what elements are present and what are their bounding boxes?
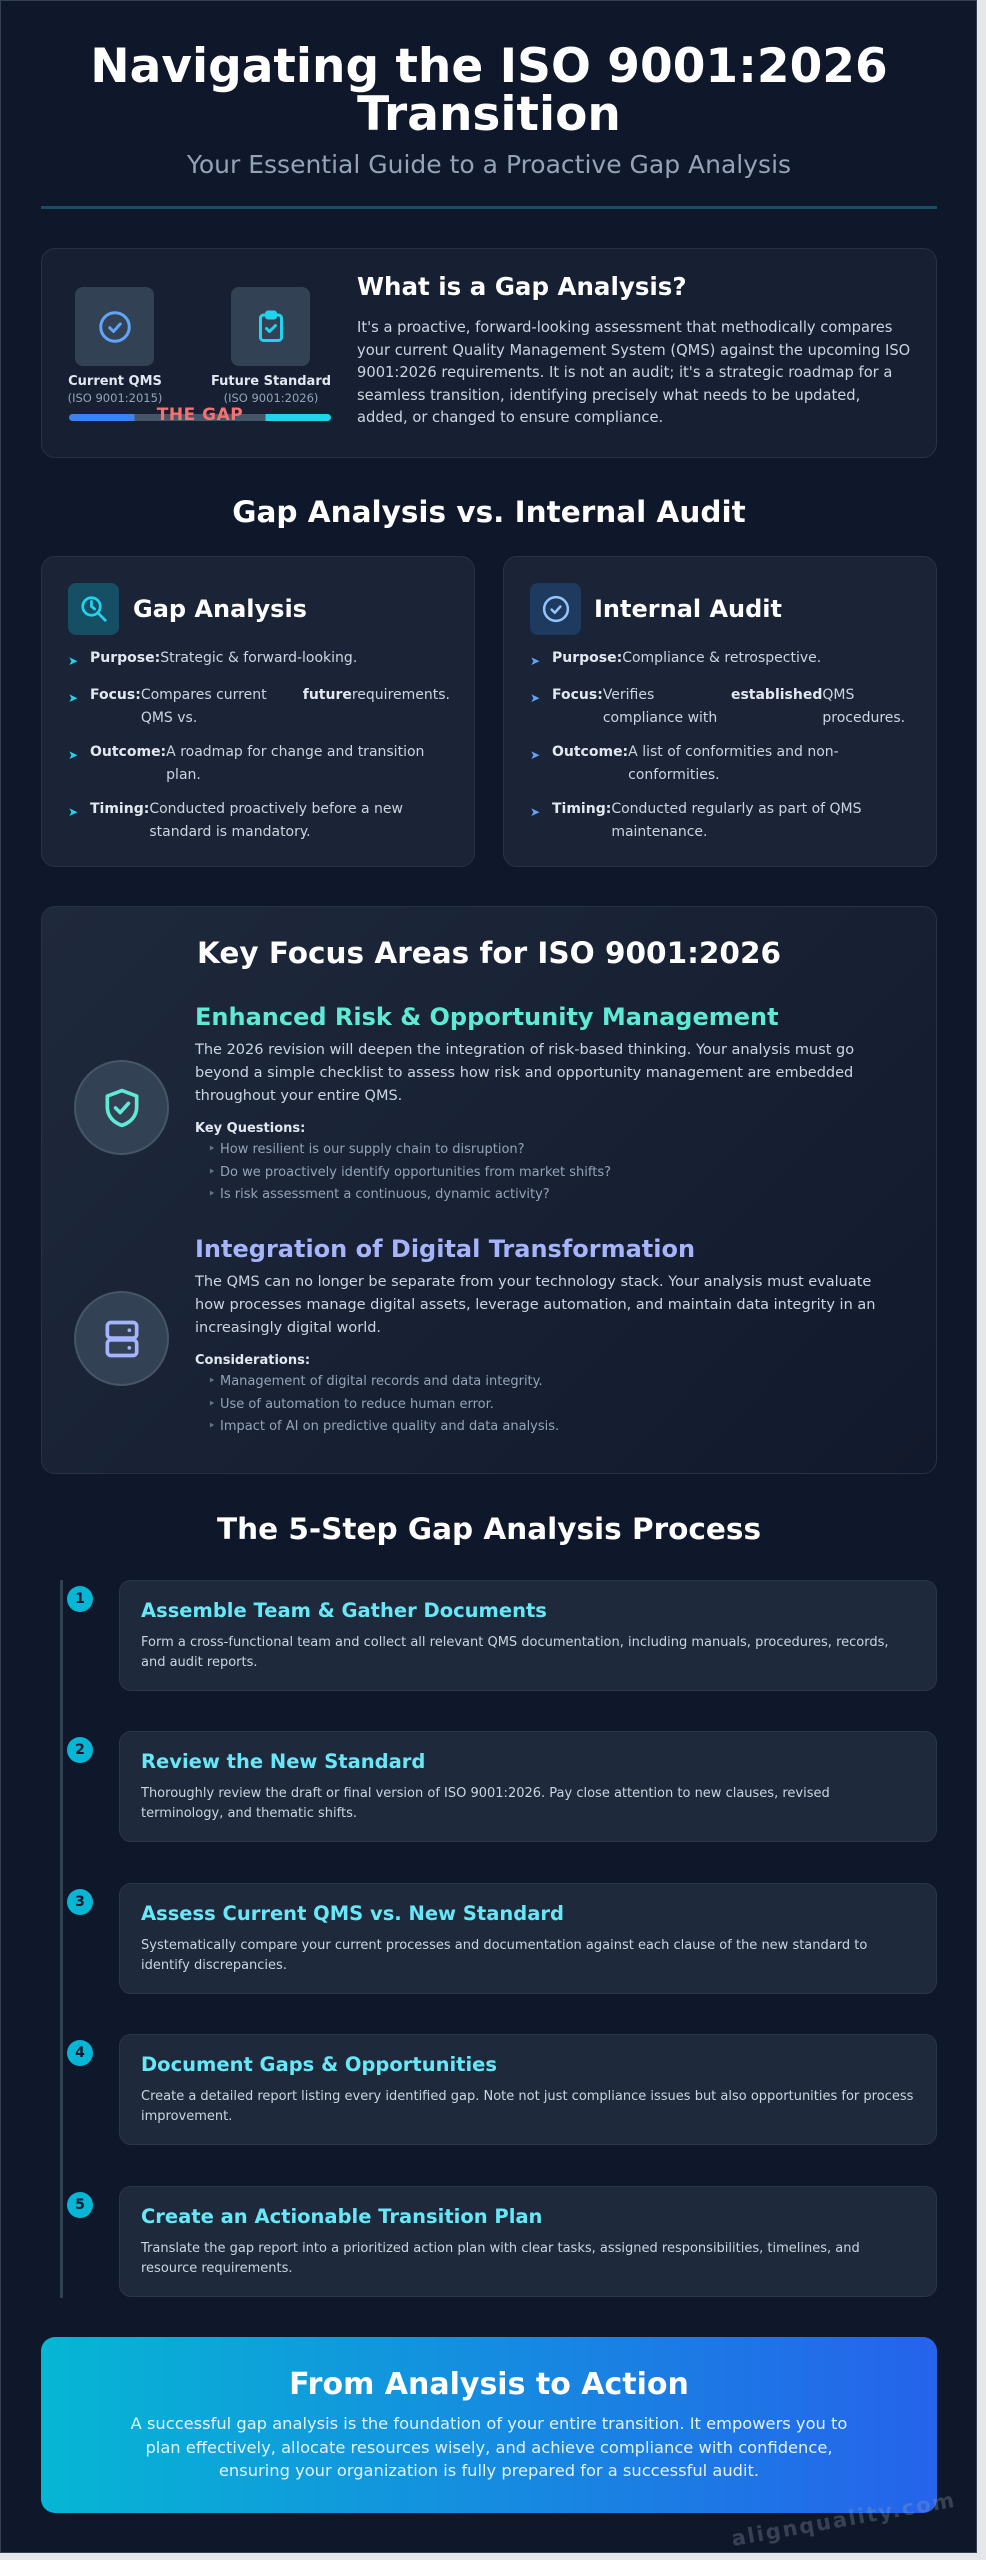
callout: from analysis to action xyxy=(41,2337,937,2513)
list: Outcome: xyxy=(90,744,166,760)
list: Conducted proactively before a new standard is mandatory. xyxy=(149,801,403,840)
text: It's a proactive, forward-looking assessment that methodically compares your current Quality Management System (QMS) against the upcoming ISO 9001:2026 requirements. It is not an audit; it's a strategic roadmap for a seamless transition, identifying precisely what needs to be updated, added, or changed to ensure compliance. xyxy=(357,319,910,426)
list: ➤ xyxy=(68,691,78,705)
step 5: Translate the gap report into a prioritized action plan with clear tasks, assigned responsibilities, timelines, and resource requirements. xyxy=(141,2241,860,2276)
step 5: 5 xyxy=(75,2197,85,2213)
list: ➤ xyxy=(530,805,540,819)
label: future standard: (ISO 9001:2026) xyxy=(224,391,318,405)
panel: what is a gap analysis xyxy=(41,248,937,458)
label: current QMS xyxy=(68,374,162,405)
step 4: 4 xyxy=(75,2045,85,2061)
the gap label: THE GAP xyxy=(157,405,243,425)
step 2: 2 xyxy=(75,1742,85,1758)
panel: internal audit xyxy=(503,556,937,867)
step 4: Create a detailed report listing every identified gap. Note not just compliance issues but also opportunities for process improvement. xyxy=(141,2089,913,2124)
list: Timing: xyxy=(90,801,149,817)
gap bar xyxy=(69,414,331,421)
icon: shield xyxy=(74,1060,169,1155)
list: established xyxy=(731,687,822,703)
heading: key focus areas: Key Focus Areas for ISO 9001:2026 xyxy=(197,936,781,970)
callout text: A successful gap analysis is the foundation of your entire transition. It empowers you to plan effectively, allocate resources wisely, and achieve compliance with confidence, ensuring your organization is fully prepared for a successful audit. xyxy=(131,2414,847,2480)
focus area: risk: Is risk assessment a continuous, dynamic activity? xyxy=(220,1187,550,1202)
list: Compares current QMS vs. requirements. xyxy=(141,687,450,726)
list: ➤ xyxy=(68,654,78,668)
step 3 xyxy=(67,1883,937,1994)
label: future standard: Future Standard xyxy=(211,374,331,389)
label: future standard xyxy=(211,374,331,405)
title: Transition xyxy=(357,87,621,142)
focus area: digital xyxy=(194,1235,875,1434)
panel: gap analysis xyxy=(41,556,475,867)
icon: future standard xyxy=(231,287,310,366)
list: ➤ xyxy=(530,654,540,668)
list: A roadmap for change and transition plan. xyxy=(166,744,424,783)
focus area: digital: Management of digital records and data integrity. xyxy=(220,1374,543,1389)
focus area: risk xyxy=(194,1003,854,1202)
list: Focus: xyxy=(90,687,141,703)
title xyxy=(90,39,888,142)
icon: check xyxy=(530,583,581,635)
list: Purpose: xyxy=(552,650,622,666)
list: ➤ xyxy=(68,748,78,762)
list: Strategic & forward-looking. xyxy=(160,650,357,666)
focus area: risk: Key Questions: xyxy=(195,1121,305,1136)
focus area: risk: How resilient is our supply chain to disruption? xyxy=(220,1142,525,1157)
heading: gap vs audit: Gap Analysis vs. Internal Audit xyxy=(232,495,746,529)
step 3: Systematically compare your current processes and documentation against each clause of the new standard to identify discrepancies. xyxy=(141,1938,867,1972)
step 1 xyxy=(67,1580,937,1691)
focus area: digital: Integration of Digital Transformation xyxy=(195,1235,695,1263)
list: A list of conformities and non-conformities. xyxy=(628,744,839,783)
list: ➤ xyxy=(68,805,78,819)
list: Outcome: xyxy=(552,744,628,760)
step 1: Form a cross-functional team and collect all relevant QMS documentation, including manuals, procedures, records, and audit reports. xyxy=(141,1635,888,1670)
focus area: digital: Use of automation to reduce human error. xyxy=(220,1396,494,1412)
label: current QMS: Current QMS xyxy=(68,374,162,389)
icon: magnifier xyxy=(68,583,119,635)
watermark: alignquality.com xyxy=(730,2488,958,2551)
focus area: digital: The QMS can no longer be separate from your technology stack. Your analysis must evaluate how processes manage digital assets, leverage automation, and maintain data integrity in an increasingly digital world. xyxy=(195,1274,875,1336)
list xyxy=(530,650,905,840)
heading: Internal Audit xyxy=(594,595,782,623)
list: Compliance & retrospective. xyxy=(622,650,821,666)
focus area: digital: Considerations: xyxy=(195,1353,310,1368)
list xyxy=(68,650,450,840)
list: Conducted regularly as part of QMS maintenance. xyxy=(611,801,862,840)
list: ➤ xyxy=(530,691,540,705)
list: Focus: xyxy=(552,687,603,703)
label: current QMS: (ISO 9001:2015) xyxy=(68,391,162,405)
panel: key focus areas xyxy=(41,906,937,1474)
icon: server xyxy=(74,1291,169,1386)
step 4: Document Gaps & Opportunities xyxy=(141,2053,497,2076)
list: Purpose: xyxy=(90,650,160,666)
step 2: Thoroughly review the draft or final version of ISO 9001:2026. Pay close attention to new clauses, revised terminology, and thematic shifts. xyxy=(141,1786,830,1820)
heading: What is a Gap Analysis? xyxy=(357,272,687,301)
title: Navigating the ISO 9001:2026 xyxy=(90,39,888,94)
callout heading: From Analysis to Action xyxy=(289,2367,689,2402)
icon: current QMS xyxy=(75,287,154,366)
heading: 5-step process: The 5-Step Gap Analysis Process xyxy=(217,1512,761,1546)
step 5: Create an Actionable Transition Plan xyxy=(141,2205,542,2228)
step 1: 1 xyxy=(75,1591,85,1607)
heading: Gap Analysis xyxy=(133,595,307,623)
step 2: Review the New Standard xyxy=(141,1750,425,1773)
step 3: Assess Current QMS vs. New Standard xyxy=(141,1902,564,1925)
focus area: risk: Do we proactively identify opportunities from market shifts? xyxy=(220,1164,611,1180)
list: Verifies compliance with QMS procedures. xyxy=(603,687,905,726)
subtitle: Your Essential Guide to a Proactive Gap Analysis xyxy=(187,150,791,179)
focus area: digital: Impact of AI on predictive quality and data analysis. xyxy=(220,1419,559,1434)
step 5 xyxy=(67,2186,937,2297)
list: future xyxy=(303,687,352,703)
list: ➤ xyxy=(530,748,540,762)
focus area: risk: Enhanced Risk & Opportunity Management xyxy=(195,1003,779,1031)
focus area: risk: The 2026 revision will deepen the integration of risk-based thinking. Your analysis must go beyond a simple checklist to assess how risk and opportunity management are embedded throughout your entire QMS. xyxy=(195,1042,854,1104)
step 2 xyxy=(67,1731,937,1842)
list: Timing: xyxy=(552,801,611,817)
step 3: 3 xyxy=(75,1894,85,1910)
step 4 xyxy=(67,2034,937,2145)
step 1: Assemble Team & Gather Documents xyxy=(141,1599,547,1622)
